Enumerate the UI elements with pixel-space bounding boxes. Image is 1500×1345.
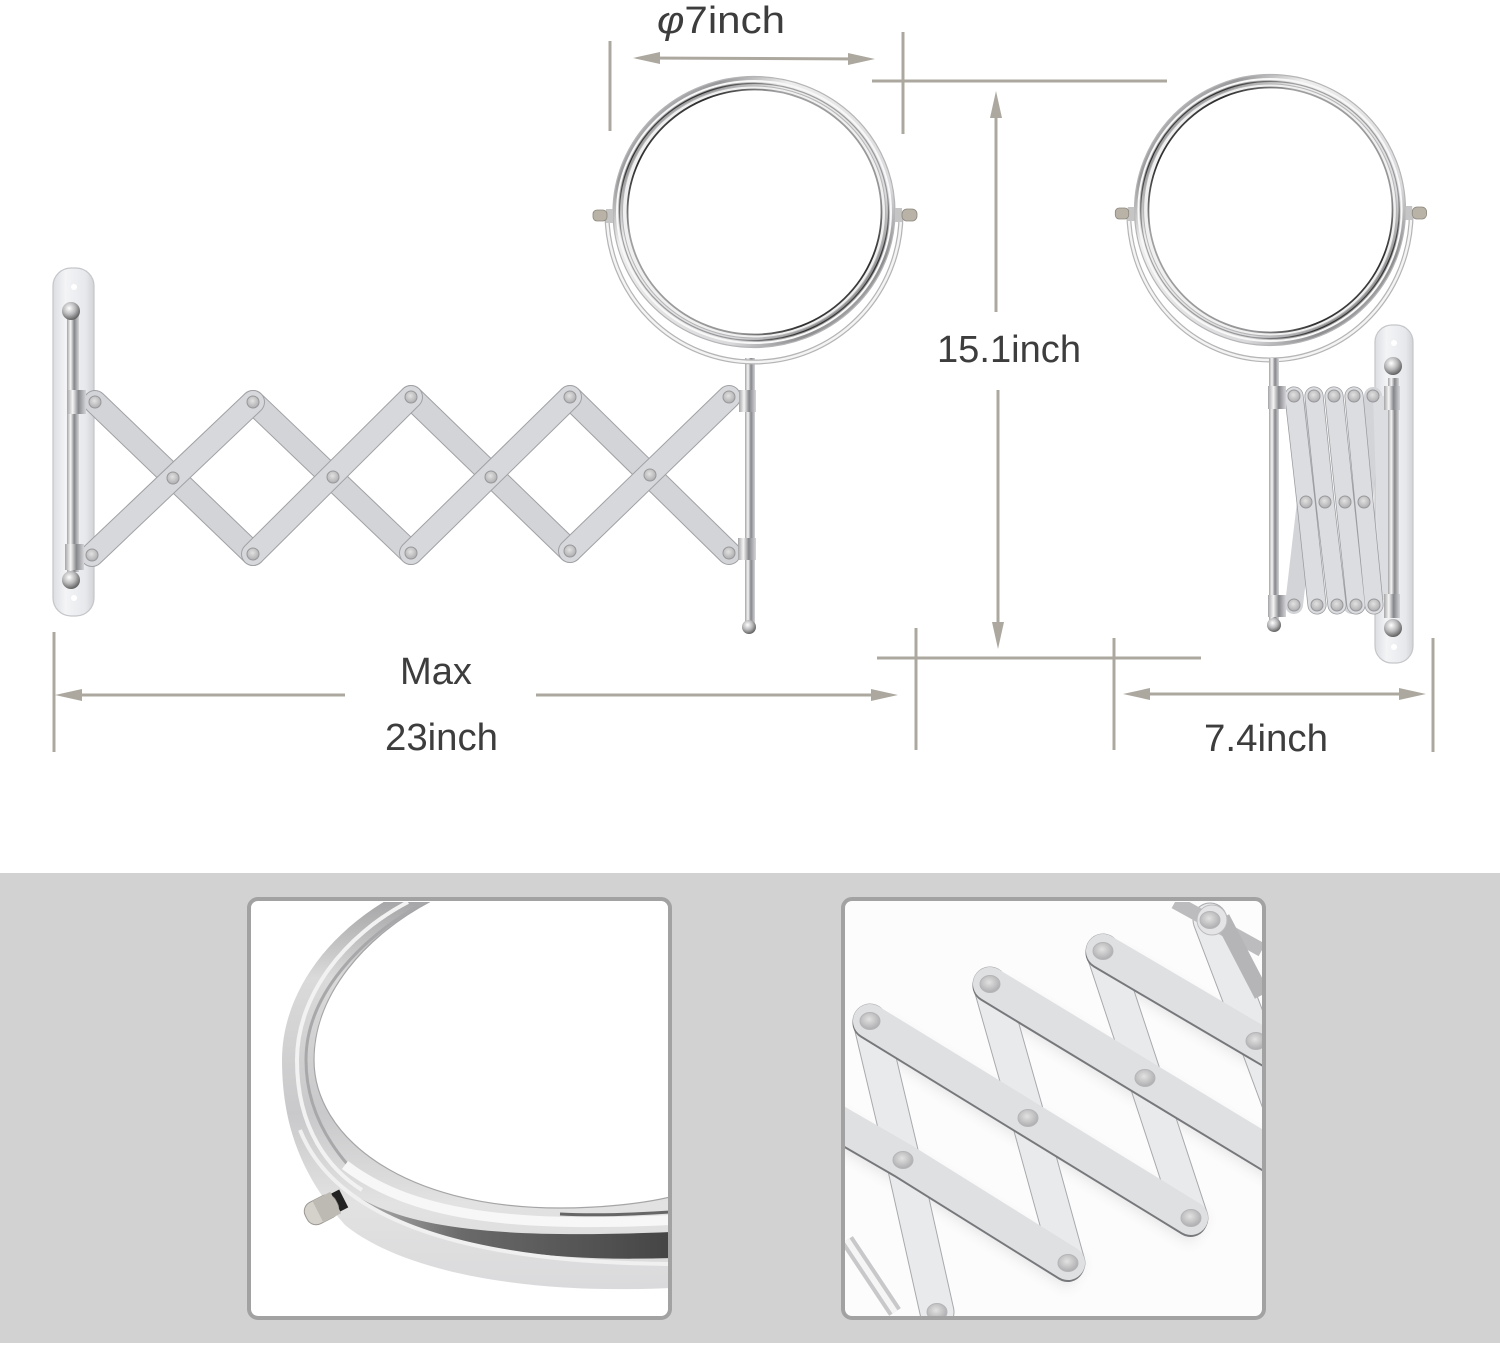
wall plate: [1375, 325, 1413, 663]
panel: mirror edge detail: [249, 899, 670, 1318]
mirror frame: [282, 900, 670, 1289]
label: height: 15.1inch: [937, 329, 1081, 371]
shallow bars: [845, 934, 1262, 1282]
inner frame shade: [304, 916, 402, 1164]
grey detail band: [0, 873, 1500, 1343]
round mirror: [1115, 74, 1427, 360]
adjustment knob: [304, 1190, 348, 1226]
dimension: max extension 23 inch: [54, 628, 916, 759]
dark channel: [361, 1198, 668, 1259]
rod and bracket top right: [1175, 902, 1262, 995]
dimension: max extension 23 inch: 23inch: [385, 717, 498, 759]
extended mirror product: [53, 76, 917, 634]
frame highlight: [297, 902, 408, 1190]
label: max: Max: [400, 651, 472, 693]
scissor arm: [86, 391, 735, 561]
folded mirror product: [1115, 74, 1427, 663]
dimension: height 15.1 inch: [872, 32, 1201, 658]
mirror rod and brackets: [738, 358, 756, 634]
rivets: [860, 912, 1266, 1320]
steep bars: [870, 920, 1300, 1312]
rods and brackets: [1267, 357, 1402, 637]
dimension: mirror diameter 7 inch: [610, 0, 875, 131]
label: diameter: φ7inch: [657, 0, 785, 42]
dimension: folded depth 7.4 inch: [1114, 638, 1433, 760]
rim shine: [345, 1165, 670, 1222]
round mirror: [593, 76, 917, 362]
wall plate: [53, 268, 94, 616]
folded scissor arm: [1288, 390, 1390, 611]
rod bottom left: [847, 1240, 895, 1312]
panel: scissor arm detail: [841, 897, 1266, 1320]
mirror glass: [314, 900, 670, 1208]
arm shadow: [845, 992, 1262, 1286]
lower frame shine: [300, 1130, 670, 1264]
wall rod and brackets: [62, 302, 86, 589]
label: depth: 7.4inch: [1204, 718, 1328, 760]
